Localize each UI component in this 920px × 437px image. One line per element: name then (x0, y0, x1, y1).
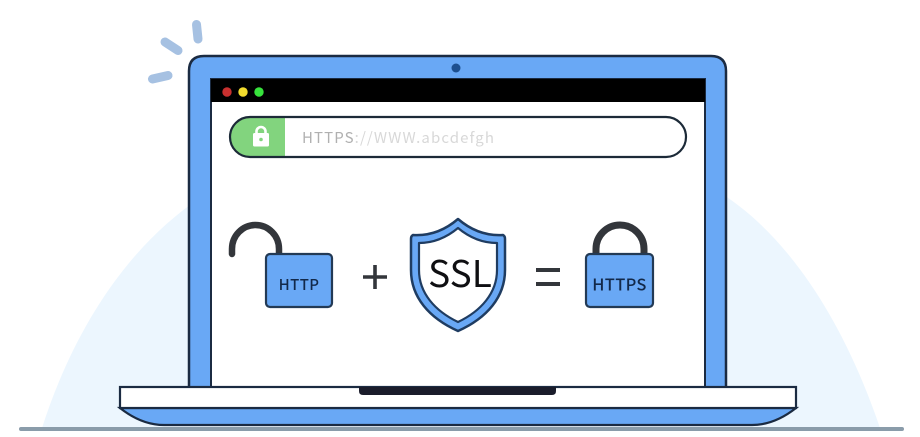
HTTP label: HTTP (279, 274, 319, 295)
webcam (452, 64, 460, 72)
trackpad notch (359, 387, 556, 395)
closed shackle (596, 225, 644, 255)
icon: white padlock (253, 127, 269, 146)
SSL label: SSL (428, 244, 492, 298)
equals sign (536, 270, 560, 284)
URL text: HTTPS://WWW.abcdefgh (302, 127, 495, 148)
sparkle lines (152, 24, 198, 79)
screen display (211, 79, 705, 390)
HTTPS label: HTTPS (592, 272, 647, 296)
base deck (120, 387, 796, 408)
laptop base (120, 387, 796, 425)
base underside (120, 408, 796, 425)
background hill (42, 190, 880, 428)
SSL shield (411, 219, 505, 331)
browser title bar (211, 79, 705, 102)
plus sign (363, 265, 387, 289)
address bar (230, 117, 686, 157)
window buttons (222, 87, 264, 97)
shield outer (411, 219, 505, 331)
lock body (266, 254, 332, 307)
lock body (586, 254, 653, 307)
closed padlock HTTPS (586, 225, 653, 307)
laptop screen (189, 56, 726, 390)
ground line (19, 427, 904, 431)
open shackle (232, 225, 279, 258)
green lock section (230, 117, 285, 157)
shield inner (419, 228, 497, 322)
laptop lid (189, 56, 726, 390)
open padlock HTTP (232, 225, 332, 307)
